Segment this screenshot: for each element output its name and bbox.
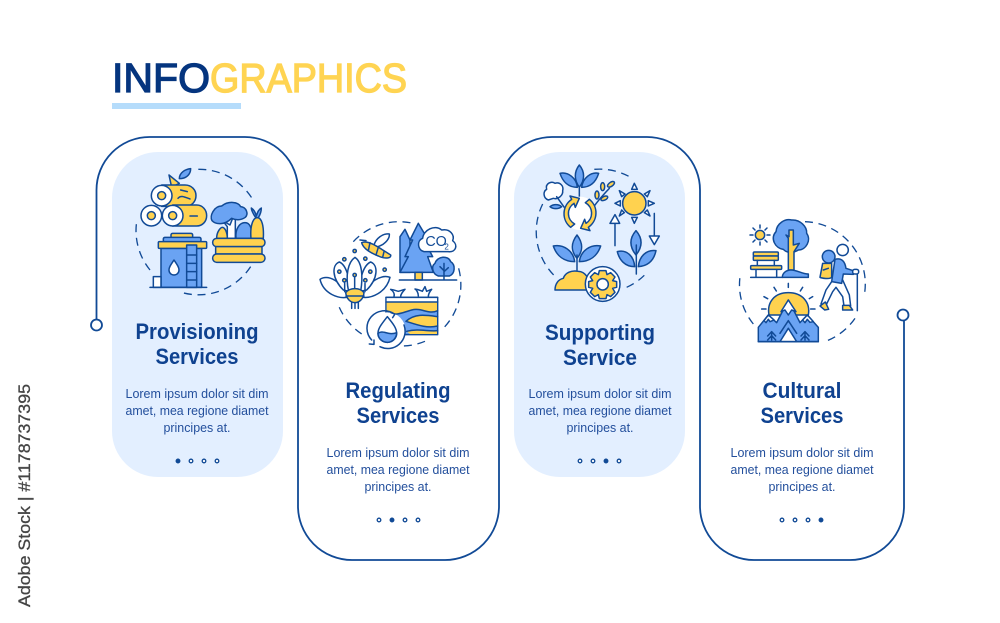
soil layers <box>367 287 438 349</box>
heading <box>545 320 655 370</box>
cycle direction arrows <box>610 213 659 246</box>
heading: Service <box>563 345 637 370</box>
leaf and branch <box>169 169 191 187</box>
heading: Cultural <box>762 378 842 403</box>
title <box>112 55 407 109</box>
bench <box>751 252 782 277</box>
icon: regulating services <box>320 222 461 349</box>
heading <box>760 378 844 428</box>
panel: supporting background <box>514 152 685 477</box>
left plant <box>553 235 601 270</box>
panel: provisioning background <box>112 152 283 477</box>
sun <box>615 183 654 223</box>
body text: amet, mea regione diamet <box>528 404 672 418</box>
card: supporting service <box>528 320 672 463</box>
icon: supporting service <box>536 165 659 301</box>
body text <box>528 387 672 435</box>
icon: provisioning services <box>136 169 265 295</box>
title: INFO <box>112 55 210 101</box>
co2 cloud: CO <box>425 234 447 250</box>
bee <box>360 234 391 258</box>
heading: Services <box>760 403 844 428</box>
right plant <box>617 231 656 274</box>
heading: Services <box>156 344 238 369</box>
body text: Lorem ipsum dolor sit dim <box>730 446 874 460</box>
hiker <box>820 244 859 311</box>
gear <box>585 267 620 301</box>
heading: Provisioning <box>136 319 258 344</box>
wheat <box>592 180 615 210</box>
icon: cultural services <box>739 220 865 342</box>
pagination dots <box>780 518 823 522</box>
connector outline <box>91 137 908 560</box>
soil mound <box>555 271 592 290</box>
heading: Services <box>356 403 440 428</box>
logs <box>141 185 207 226</box>
co2 cloud <box>419 228 456 252</box>
body text: principes at. <box>566 421 634 435</box>
heading <box>136 319 258 369</box>
body text <box>126 387 269 435</box>
pagination dots <box>377 518 420 522</box>
body text <box>326 446 470 494</box>
body text: principes at. <box>164 421 230 435</box>
pagination dots <box>578 459 621 463</box>
heading <box>346 378 450 428</box>
pagination dots <box>176 459 219 463</box>
heading: Regulating <box>346 378 450 403</box>
body text <box>730 446 874 494</box>
small sun <box>750 225 770 245</box>
body text: Lorem ipsum dolor sit dim <box>126 387 268 401</box>
water tank <box>150 233 207 287</box>
flower <box>320 249 390 308</box>
mountains and sunrise <box>758 283 818 342</box>
body text: principes at. <box>364 480 432 494</box>
title: GRAPHICS <box>210 55 407 101</box>
cycle arrows <box>563 196 597 231</box>
trees <box>399 223 457 280</box>
body text: amet, mea regione diamet <box>730 463 874 477</box>
body text: Lorem ipsum dolor sit dim <box>326 446 470 460</box>
food basket <box>211 202 265 262</box>
card: cultural services <box>730 378 874 522</box>
card: provisioning services <box>126 319 269 463</box>
card: regulating services <box>326 378 470 522</box>
cotton <box>544 182 565 209</box>
heading: Supporting <box>545 320 655 345</box>
body text: Lorem ipsum dolor sit dim <box>528 387 672 401</box>
body text: amet, mea regione diamet <box>126 404 269 418</box>
park tree <box>773 220 809 277</box>
side credit: Adobe Stock | #1178737395 <box>15 384 34 607</box>
co2 cloud: 2 <box>444 242 449 251</box>
top plant <box>560 165 599 197</box>
body text: amet, mea regione diamet <box>326 463 470 477</box>
body text: principes at. <box>768 480 836 494</box>
